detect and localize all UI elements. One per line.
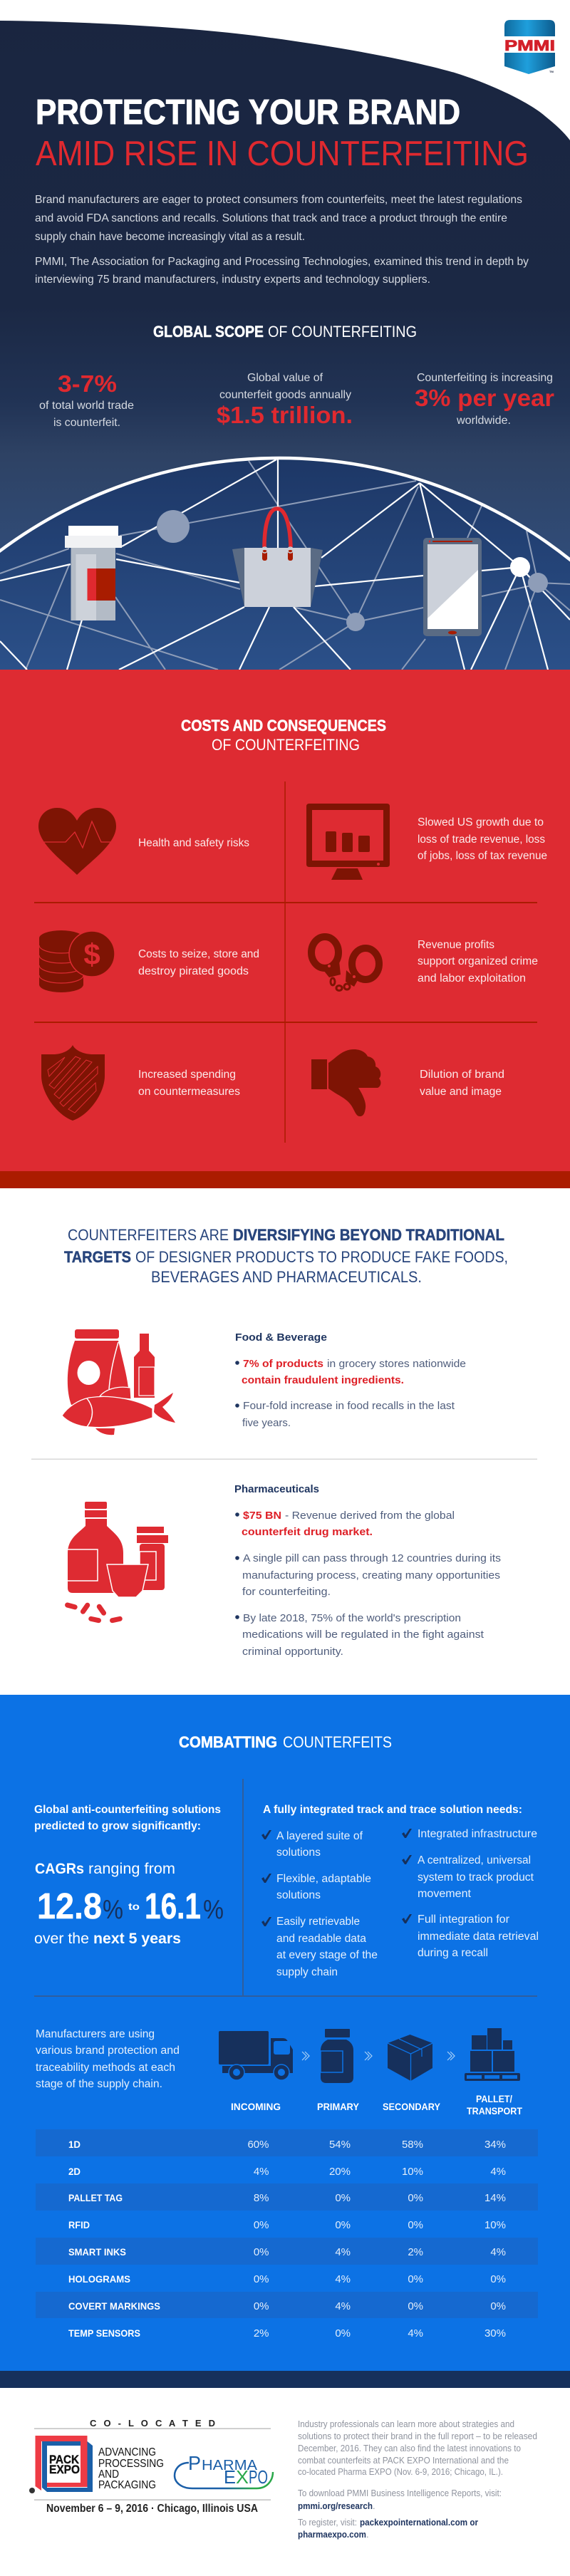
row: temp sensors: 2% [254,2327,269,2339]
stat: global value: $1.5 trillion. [217,402,353,428]
icon: pill bottle [65,526,122,620]
text: on countermeasures [138,1086,240,1098]
text block: methods intro: Manufacturers are using [36,2028,155,2040]
row: 2D: 2D [68,2166,81,2177]
row: holograms: 0% [254,2273,269,2285]
icon: shopping bag [232,509,323,607]
text block: more information: To register, visit: [298,2517,357,2528]
heading: diversifying: COUNTERFEITERS ARE [68,1226,229,1244]
logo: Pack Expo: PACKAGING [98,2479,156,2491]
logo: Pack Expo: ADVANCING [98,2446,156,2458]
heading: diversifying: OF DESIGNER PRODUCTS TO PRODUCE FAKE FOODS, [135,1248,508,1266]
heading: global scope: GLOBAL SCOPE [153,323,264,341]
heading: combatting [179,1733,392,1751]
checklist: track and trace needs: solutions [276,1847,321,1859]
icon: striped shield [41,1045,105,1121]
stat: global value: Global value of [247,372,323,384]
text: support organized crime [418,955,538,967]
panel: footer [29,2418,537,2540]
text block: pharmaceuticals: - Revenue derived from the global [285,1510,455,1522]
row: RFID: 0% [335,2219,351,2231]
heading: diversifying: DIVERSIFYING BEYOND TRADITIONAL [233,1226,504,1244]
callout: market growth [34,1804,224,1947]
intro text: interviewing 75 brand manufacturers, industry experts and technology suppliers. [35,274,430,286]
row: 2D: 4% [490,2166,506,2178]
row: covert markings: 4% [335,2300,351,2312]
logo: Pack Expo: EXPO [49,2463,80,2476]
callout: market growth: ranging from [88,1861,175,1877]
row: covert markings: 0% [254,2300,269,2312]
text block: pharmaceuticals: manufacturing process, creating many opportunities [242,1569,500,1582]
row: 1D: 60% [247,2139,269,2151]
checklist: track and trace needs: at every stage of the [276,1949,378,1961]
text block: more information: pmmi.org/research [298,2500,373,2511]
row: smart inks: SMART INKS [68,2246,126,2258]
row: 2D: 4% [254,2166,269,2178]
text block: more information: combat counterfeits at PACK EXPO International and the [298,2455,509,2466]
network lines: white [0,458,570,670]
row: holograms: 0% [408,2273,423,2285]
row: pallet tag: 0% [335,2192,351,2204]
text block: more information: co-located Pharma EXPO (Nov. 6-9, 2016; Chicago, IL.). [298,2466,503,2477]
arrow: secondary to pallet [447,2052,455,2060]
text block: pharmaceuticals: counterfeit drug market. [242,1526,373,1538]
text: of jobs, loss of tax revenue [418,850,547,862]
globe network illustration [0,456,570,670]
callout: market growth: predicted to grow significantly: [34,1820,201,1832]
arrow: primary to secondary [365,2052,372,2060]
row: temp sensors: 30% [484,2327,506,2339]
heading: costs and consequences [181,717,386,754]
title: AMID RISE IN COUNTERFEITING [36,135,529,173]
column headers: PRIMARY [317,2101,360,2112]
stat: global value [217,372,353,428]
text block: more information: . [366,2529,369,2540]
logo: Pharma Expo: HARMA [202,2458,258,2473]
row: 1D [68,2139,506,2151]
row: RFID: RFID [68,2219,90,2230]
stat: share of world trade [39,370,134,429]
row: RFID: 10% [484,2219,506,2231]
stat: share of world trade: 3-7% [58,370,117,397]
row: 1D: 58% [402,2139,423,2151]
row: holograms [68,2273,506,2285]
text: Costs to seize, store and [138,948,259,960]
callout: market growth: % [203,1895,224,1925]
title: PROTECTING YOUR BRAND [36,93,460,132]
text: and labor exploitation [418,972,526,985]
row: pallet tag: PALLET TAG [68,2192,123,2203]
text block: more information: To download PMMI Business Intelligence Reports, visit: [298,2488,502,2498]
dark red base band [0,1171,570,1188]
text block: food and beverage: contain fraudulent ingredients. [242,1374,404,1386]
text block: more information: pharmaexpo.com [298,2529,366,2540]
stat: annual growth: Counterfeiting is increasing [417,372,553,384]
heading: combatting: COUNTERFEITS [283,1733,392,1751]
row: 1D: 1D [68,2139,81,2150]
checklist: track and trace needs: solutions [276,1889,321,1901]
intro text: supply chain have become increasingly vital as a result. [35,231,305,243]
text block: more information: December, 2016. They can also find the latest innovations to [298,2443,521,2453]
text: Increased spending [138,1069,236,1081]
text: Slowed US growth due to [418,816,544,829]
text block: pharmaceuticals [234,1483,501,1658]
logo: Pharma Expo: E [224,2466,236,2488]
stat: annual growth: worldwide. [456,415,511,427]
intro text [35,194,529,286]
row: RFID [68,2219,506,2231]
logo: Pharma Expo: PO [249,2466,268,2488]
network nodes [157,510,548,631]
text block: food and beverage: 7% of products [243,1358,323,1370]
text block: methods intro: traceability methods at each [36,2062,175,2074]
callout: market growth: 16.1 [145,1886,201,1926]
red background [0,670,570,1171]
panel: header and global scope [0,20,570,670]
checklist: track and trace needs: and readable data [276,1933,366,1945]
arrow: incoming to primary [302,2052,309,2060]
row: smart inks: 4% [335,2246,351,2258]
intro text: Brand manufacturers are eager to protect consumers from counterfeits, meet the latest regulations [35,194,522,206]
item: brand dilution [311,1049,504,1116]
text block: more information: solutions to protect their brand in the full report – to be released [298,2431,537,2441]
text block: food and beverage: Food & Beverage [235,1331,327,1344]
checklist: track and trace needs: Easily retrievable [276,1916,360,1928]
checklist: track and trace needs: immediate data retrieval [418,1931,539,1943]
heading: diversifying [64,1226,508,1286]
column headers: PALLET/ [476,2093,512,2104]
text [418,939,538,985]
row: covert markings: 0% [490,2300,506,2312]
text block: methods intro: stage of the supply chain. [36,2078,162,2090]
text block: pharmaceuticals: A single pill can pass through 12 countries during its [243,1552,501,1564]
callout: market growth: CAGRs [35,1861,84,1877]
row: pallet tag: 8% [254,2192,269,2204]
text block: more information [298,2419,537,2540]
icon: pallet [465,2028,520,2081]
text [138,1069,240,1098]
table: traceability methods by stage [36,2129,538,2339]
row: pallet tag: 14% [484,2192,506,2204]
panel: diversifying targets [31,1226,537,1658]
row: temp sensors: TEMP SENSORS [68,2327,140,2339]
icon: jar [321,2029,353,2083]
row: 2D [68,2166,506,2178]
text block: more information: . [373,2500,375,2511]
event date and location: November 6 – 9, 2016 · Chicago, Illinois USA [46,2503,258,2515]
panel: costs and consequences [0,670,570,1188]
callout: market growth: next 5 years [93,1931,181,1947]
callout: market growth: % [103,1895,123,1925]
row: temp sensors [68,2327,506,2339]
callout: market growth: Global anti-counterfeiting solutions [34,1804,221,1816]
row: smart inks: 4% [490,2246,506,2258]
checklist: track and trace needs: A centralized, universal [418,1854,531,1866]
row: 1D: 54% [329,2139,351,2151]
heading: combatting: COMBATTING [179,1733,277,1751]
logo: Pharma Expo: X [236,2466,249,2488]
callout: market growth: over the [34,1931,89,1947]
checklist: track and trace needs: A layered suite of [276,1830,363,1842]
icon: coins [39,930,115,992]
text [420,1069,504,1098]
text: Revenue profits [418,939,494,951]
globe outline [0,456,570,561]
column headers: INCOMING [231,2101,281,2112]
intro text: PMMI, The Association for Packaging and Processing Technologies, examined this trend in depth by [35,256,529,268]
icon: smartphone [423,538,482,636]
title [36,93,529,173]
icon: thumbs down [311,1049,380,1116]
row: smart inks [68,2246,506,2258]
icon: pharmaceuticals [64,1502,168,1624]
icon: coins: $ [83,938,100,971]
stat: global value: counterfeit goods annually [219,389,351,401]
text [418,816,547,862]
row: RFID: 0% [254,2219,269,2231]
heading: global scope [153,323,417,341]
icon: PMMI logo shield: PMMI [504,38,555,54]
text block: more information: packexpointernational.com or [360,2517,478,2528]
network lines: grey [0,461,570,670]
text: Health and safety risks [138,837,249,849]
checklist: track and trace needs: Full integration for [418,1913,509,1926]
item: health and safety [38,808,249,875]
row: temp sensors: 4% [408,2327,423,2339]
intro text: and avoid FDA sanctions and recalls. Solutions that track and trace a product through the entire [35,212,507,224]
checklist: track and trace needs: Integrated infrastructure [418,1828,537,1840]
row: smart inks: 2% [408,2246,423,2258]
row: holograms: 0% [490,2273,506,2285]
text block: food and beverage [235,1331,466,1429]
text block: methods intro [36,2028,180,2090]
stat: share of world trade: is counterfeit. [53,417,120,429]
icon: food and beverage [62,1329,175,1435]
text: value and image [420,1086,502,1098]
icon: box [388,2035,432,2081]
logo: Pharma Expo [175,2452,273,2488]
checklist: track and trace needs [261,1804,539,1978]
logo: Pack Expo: PACK [49,2453,80,2466]
logo: Pharma Expo: P [188,2452,201,2474]
icon: handcuffs [311,937,379,990]
column headers: SECONDARY [383,2101,441,2112]
item: slowed growth [306,804,547,880]
item: organized crime [311,937,538,990]
item: countermeasures [41,1045,240,1121]
icon: monitor chart [306,804,390,880]
callout: market growth: 12.8 [37,1886,102,1926]
text block: pharmaceuticals: By late 2018, 75% of the world's prescription [243,1612,461,1624]
heading: costs and consequences: COSTS AND CONSEQUENCES [181,717,386,734]
text block: food and beverage: in grocery stores nationwide [327,1358,466,1370]
checklist: track and trace needs: system to track product [418,1871,534,1884]
heading: diversifying: TARGETS [64,1248,131,1266]
text block: more information: Industry professionals can learn more about strategies and [298,2419,514,2429]
checklist: track and trace needs: movement [418,1888,472,1900]
text: Dilution of brand [420,1069,504,1081]
row: covert markings: 0% [408,2300,423,2312]
row: holograms: 4% [335,2273,351,2285]
text block: methods intro: various brand protection and [36,2045,180,2057]
row: pallet tag [68,2192,506,2204]
checklist: track and trace needs: A fully integrated track and trace solution needs: [263,1804,522,1816]
logo: Pack Expo [29,2436,164,2493]
text block: pharmaceuticals: criminal opportunity. [242,1646,343,1658]
row: 2D: 20% [329,2166,351,2178]
stat: annual growth: 3% per year [415,385,554,411]
row: covert markings: COVERT MARKINGS [68,2300,160,2312]
stat: annual growth [415,372,554,427]
checklist: track and trace needs: supply chain [276,1966,338,1978]
text: destroy pirated goods [138,965,249,977]
text block: pharmaceuticals: for counterfeiting. [242,1586,331,1598]
column headers: TRANSPORT [467,2105,522,2117]
icon: PMMI logo shield [504,20,555,74]
panel: combatting counterfeits [0,1695,570,2388]
stat: share of world trade: of total world trade [39,400,134,412]
text block: food and beverage: five years. [242,1417,291,1429]
item: seizure costs [39,930,259,992]
checklist: track and trace needs: during a recall [418,1947,488,1959]
co-located heading: C O - L O C A T E D [90,2418,215,2429]
icon: PMMI logo shield: TM [549,70,554,73]
text block: food and beverage: Four-fold increase in food recalls in the last [243,1400,455,1412]
callout: market growth: to [128,1901,140,1912]
navy curved background [0,21,570,670]
text block: pharmaceuticals: Pharmaceuticals [234,1483,319,1495]
row: 2D: 10% [402,2166,423,2178]
row: RFID: 0% [408,2219,423,2231]
row: smart inks: 0% [254,2246,269,2258]
logo: Pack Expo: AND [98,2468,119,2481]
heading: costs and consequences: OF COUNTERFEITING [212,736,360,754]
text: loss of trade revenue, loss [418,833,545,846]
row: pallet tag: 0% [408,2192,423,2204]
heading: diversifying: BEVERAGES AND PHARMACEUTICALS. [151,1268,422,1286]
logo: Pack Expo: PROCESSING [98,2458,164,2470]
column headers [231,2093,522,2117]
row: holograms: HOLOGRAMS [68,2273,130,2285]
text block: pharmaceuticals: $75 BN [243,1510,281,1522]
checklist: track and trace needs: Flexible, adaptable [276,1873,371,1885]
text block: pharmaceuticals: medications will be regulated in the fight against [242,1629,484,1641]
icon: heart with pulse [38,808,116,875]
row: temp sensors: 0% [335,2327,351,2339]
blue background [0,1695,570,2371]
dark navy base band [0,2371,570,2388]
row: covert markings [68,2300,506,2312]
checkmarks [261,1829,412,1926]
text [138,948,259,977]
icon: truck [219,2031,293,2080]
heading: global scope: OF COUNTERFEITING [268,323,417,341]
row: 1D: 34% [484,2139,506,2151]
